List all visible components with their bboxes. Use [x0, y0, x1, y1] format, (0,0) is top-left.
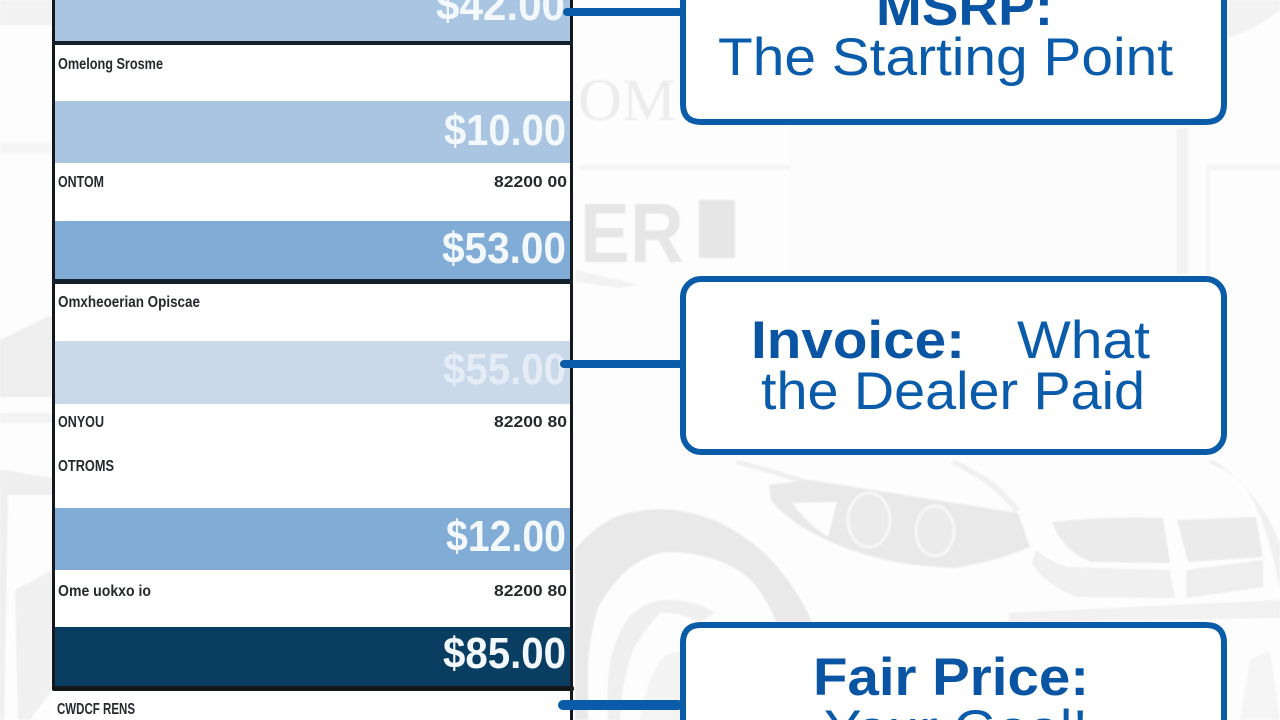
- row: Onyou: ONYOU: [58, 414, 104, 431]
- callout: Fair Price: Fair Price:: [813, 648, 1089, 707]
- price table: [52, 0, 574, 720]
- row label: Omelong Srosme: Omelong Srosme: [58, 56, 163, 73]
- row: $42.00: [54, 0, 571, 42]
- row: $55.00: $55.00: [443, 345, 566, 394]
- row: $53.00: $53.00: [442, 224, 566, 273]
- callout: Invoice: What: [1017, 311, 1150, 370]
- row label: Omxheoerian Opiscae: Omxheoerian Opiscae: [58, 294, 200, 311]
- background: faded dealership and car: OM: [578, 67, 676, 133]
- connector: Fair Price: [558, 700, 683, 710]
- callout: Invoice: the Dealer Paid: [761, 362, 1145, 421]
- connector: MSRP: [563, 8, 683, 16]
- row label: Cwdcf Rens: CWDCF RENS: [57, 701, 135, 718]
- row label: Otroms: OTROMS: [58, 458, 114, 475]
- row: Ome uokxo: Ome uokxo io: [58, 583, 151, 600]
- row: $12.00: $12.00: [446, 512, 566, 561]
- row: Onyou: [58, 414, 567, 431]
- callout: Fair Price: [683, 625, 1224, 720]
- row: $10.00: $10.00: [444, 106, 566, 155]
- row: Ome uokxo: 82200 80: [494, 583, 567, 600]
- callout: MSRP: [683, 0, 1224, 122]
- row: Ome uokxo: [58, 583, 567, 600]
- connector: Invoice: [560, 360, 683, 368]
- row: $10.00: [54, 101, 571, 163]
- row: Onyou: 82200 80: [494, 414, 567, 431]
- callout: Invoice: [683, 279, 1224, 452]
- row: Ontom: 82200 00: [494, 174, 567, 191]
- row: Ontom: ONTOM: [58, 174, 104, 191]
- row: $85.00 total: $85.00: [443, 629, 566, 678]
- row: Ontom: [58, 174, 567, 191]
- callout: Invoice: Invoice:: [751, 311, 965, 370]
- row: $12.00: [54, 508, 571, 570]
- row: $85.00 total: [54, 627, 571, 687]
- row: $55.00: [54, 341, 571, 404]
- background: faded dealership and car: ER: [580, 186, 684, 280]
- row: $53.00: [54, 221, 571, 279]
- callout: MSRP: The Starting Point: [718, 28, 1173, 87]
